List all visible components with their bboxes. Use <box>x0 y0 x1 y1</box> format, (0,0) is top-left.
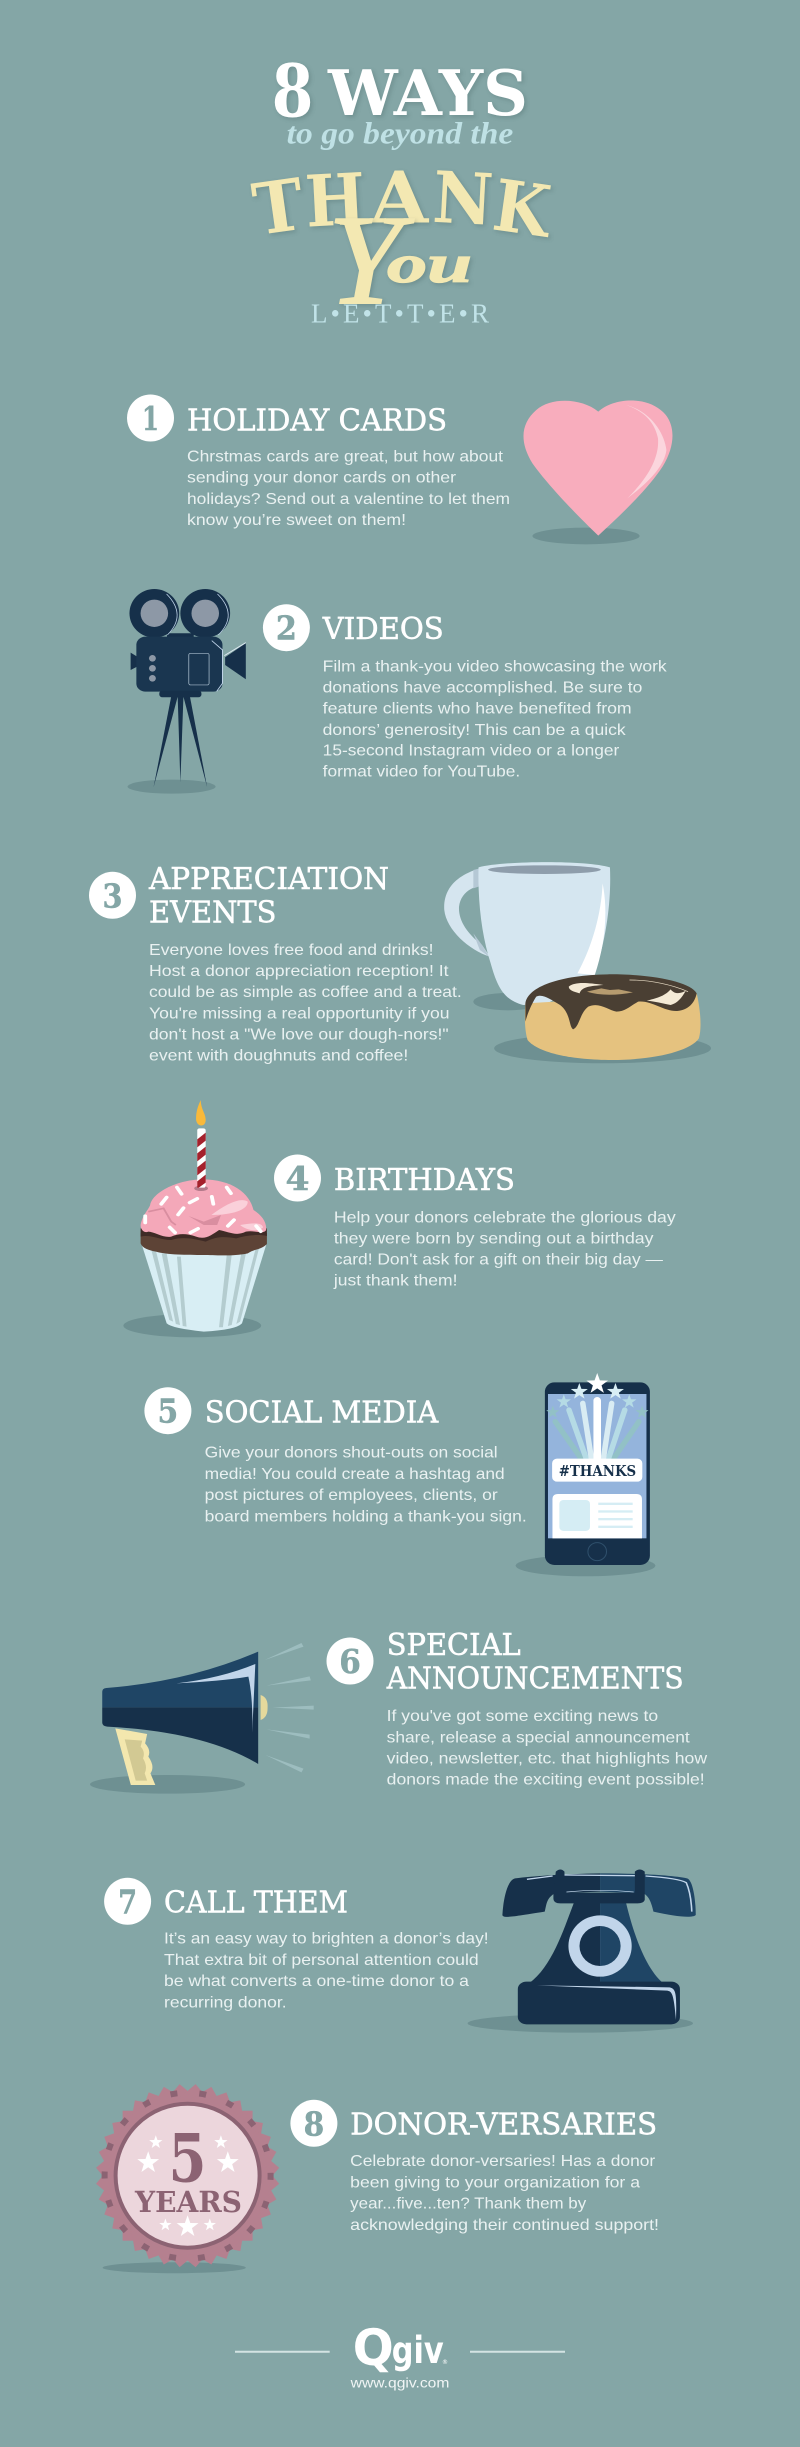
text block: holiday cards: holidays? Send out a valentine to let them <box>187 491 510 508</box>
heading: special announcements: ANNOUNCEMENTS <box>386 1661 684 1695</box>
number badge 1: 1 <box>142 399 159 438</box>
logo: qgiv: ® <box>442 2359 448 2366</box>
icon: video camera <box>128 589 246 794</box>
icon: coffee mug <box>444 862 610 1010</box>
text block: appreciation events: You're missing a real opportunity if you <box>149 1005 450 1022</box>
icon: megaphone <box>90 1643 314 1794</box>
icon: smartphone <box>516 1373 655 1576</box>
icon: anniversary badge: YEARS <box>134 2185 242 2219</box>
text block: social media: post pictures of employees, clients, or <box>205 1487 498 1504</box>
number badge 5 <box>144 1387 191 1434</box>
text block: donor-versaries: Celebrate donor-versaries! Has a donor <box>350 2153 656 2170</box>
number badge 2: 2 <box>276 609 297 648</box>
text block: videos: donations have accomplished. Be sure to <box>323 679 642 696</box>
text block: videos: 15-second Instagram video or a longer <box>323 743 620 760</box>
title word: you <box>328 189 472 331</box>
text block: birthdays: just thank them! <box>333 1273 458 1290</box>
heading: donor-versaries: DONOR-VERSARIES <box>350 2107 657 2141</box>
number badge 5: 5 <box>158 1392 178 1431</box>
heading: videos: VIDEOS <box>322 612 444 646</box>
text block: social media: Give your donors shout-outs on social <box>205 1445 498 1462</box>
text block: donor-versaries: year...five...ten? Thank them by <box>350 2195 586 2212</box>
logo: qgiv <box>353 2319 448 2377</box>
text block: call them: It’s an easy way to brighten a donor’s day! <box>164 1930 489 1947</box>
text block: videos: Film a thank-you video showcasing the work <box>323 659 668 676</box>
text block: birthdays: Help your donors celebrate the glorious day <box>334 1209 676 1226</box>
number badge 2 <box>263 604 310 651</box>
title word: thank: A <box>369 156 429 240</box>
title word: thank: H <box>303 157 368 244</box>
text block: donor-versaries: been giving to your organization for a <box>350 2174 640 2191</box>
title word: thank: K <box>488 163 557 254</box>
title word: thank <box>248 155 557 254</box>
number badge 7: 7 <box>118 1882 137 1921</box>
panel: 3 appreciation events <box>89 862 711 1065</box>
text block: special announcements <box>387 1708 708 1788</box>
title word: thank: N <box>431 155 495 242</box>
logo: qgiv: Q <box>353 2319 394 2377</box>
panel: 2 videos <box>128 589 668 794</box>
text block: videos: donors’ generosity! This can be a quick <box>323 722 627 739</box>
text block: appreciation events: don't host a "We love our dough-nors!" <box>149 1026 449 1043</box>
heading: holiday cards: HOLIDAY CARDS <box>187 404 447 438</box>
title line: 8 ways <box>272 48 528 134</box>
text block: appreciation events: Host a donor appreciation reception! It <box>149 963 449 980</box>
title line: letter: L•E•T•T•E•R <box>311 298 489 328</box>
heading: appreciation events <box>148 862 389 929</box>
text block: holiday cards: Chrstmas cards are great, but how about <box>187 449 504 466</box>
number badge 8: 8 <box>304 2104 324 2143</box>
text block: birthdays: they were born by sending out a birthday <box>334 1230 654 1247</box>
text block: special announcements: If you've got some exciting news to <box>387 1708 658 1725</box>
number badge 6 <box>326 1638 374 1684</box>
title line: 8 ways: WAYS <box>327 56 528 130</box>
footer url: www.qgiv.com <box>350 2375 449 2391</box>
number badge 3 <box>89 872 136 919</box>
text block: appreciation events: event with doughnuts and coffee! <box>149 1048 408 1065</box>
logo: qgiv: giv <box>392 2329 444 2372</box>
text block: holiday cards: sending your donor cards on other <box>187 470 457 487</box>
text block: special announcements: video, newsletter, etc. that highlights how <box>387 1750 708 1767</box>
text block: call them <box>164 1930 489 2011</box>
title line: 8 ways: 8 <box>272 48 313 134</box>
text block: appreciation events: could be as simple as coffee and a treat. <box>149 984 462 1001</box>
number badge 6: 6 <box>339 1642 361 1681</box>
number badge 4: 4 <box>286 1159 310 1198</box>
title word: you: Y <box>328 189 414 331</box>
panel: 8 donor-versaries <box>96 2084 659 2273</box>
text block: call them: recurring donor. <box>164 1994 287 2011</box>
icon: rotary telephone <box>468 1869 696 2033</box>
icon: cupcake <box>123 1100 267 1337</box>
icon: anniversary badge: 5 <box>168 2120 206 2198</box>
heading: special announcements: SPECIAL <box>387 1628 521 1662</box>
heading: call them: CALL THEM <box>164 1885 348 1919</box>
footer <box>235 2319 565 2391</box>
text block: donor-versaries: acknowledging their continued support! <box>350 2217 659 2234</box>
heading: birthdays: BIRTHDAYS <box>334 1163 515 1197</box>
text block: social media <box>205 1445 527 1525</box>
text block: special announcements: share, release a special announcement <box>387 1729 690 1746</box>
panel: 6 special announcements <box>90 1628 708 1794</box>
text block: donor-versaries <box>350 2153 659 2234</box>
text block: call them: That extra bit of personal attention could <box>164 1952 479 1969</box>
title line: to go beyond the: to go beyond the <box>287 115 514 150</box>
number badge 3: 3 <box>102 876 122 915</box>
text block: videos <box>323 659 668 781</box>
heading: appreciation events: APPRECIATION <box>148 862 389 896</box>
text block: appreciation events <box>149 942 462 1065</box>
panel: 4 birthdays <box>123 1100 676 1337</box>
panel: 1 holiday cards <box>127 394 672 544</box>
number badge 4 <box>274 1154 321 1202</box>
text block: holiday cards <box>187 449 510 529</box>
text block: birthdays: card! Don't ask for a gift on their big day — <box>334 1251 663 1268</box>
number badge 8 <box>290 2100 337 2147</box>
title <box>248 48 557 331</box>
text block: social media: media! You could create a hashtag and <box>205 1466 505 1483</box>
text block: videos: feature clients who have benefited from <box>323 700 632 717</box>
panel: 7 call them <box>104 1869 696 2033</box>
text block: call them: be what converts a one-time donor to a <box>164 1973 469 1990</box>
panel: 5 social media <box>144 1373 655 1576</box>
title word: thank: T <box>248 162 309 252</box>
text block: appreciation events: Everyone loves free food and drinks! <box>149 942 434 959</box>
icon: heart <box>523 401 672 544</box>
text block: social media: board members holding a thank-you sign. <box>205 1508 527 1525</box>
heading: social media: SOCIAL MEDIA <box>205 1396 439 1430</box>
title word: you: ou <box>387 234 472 294</box>
icon: smartphone: #THANKS <box>559 1462 636 1480</box>
text block: birthdays <box>333 1209 676 1290</box>
icon: doughnut <box>494 974 711 1063</box>
heading: special announcements <box>386 1628 684 1695</box>
number badge 7 <box>104 1878 151 1925</box>
icon: anniversary badge <box>96 2084 279 2273</box>
heading: appreciation events: EVENTS <box>149 895 276 929</box>
number badge 1 <box>127 394 174 442</box>
text block: videos: format video for YouTube. <box>323 764 520 781</box>
text block: special announcements: donors made the exciting event possible! <box>387 1771 705 1788</box>
text block: holiday cards: know you’re sweet on them! <box>187 512 406 529</box>
